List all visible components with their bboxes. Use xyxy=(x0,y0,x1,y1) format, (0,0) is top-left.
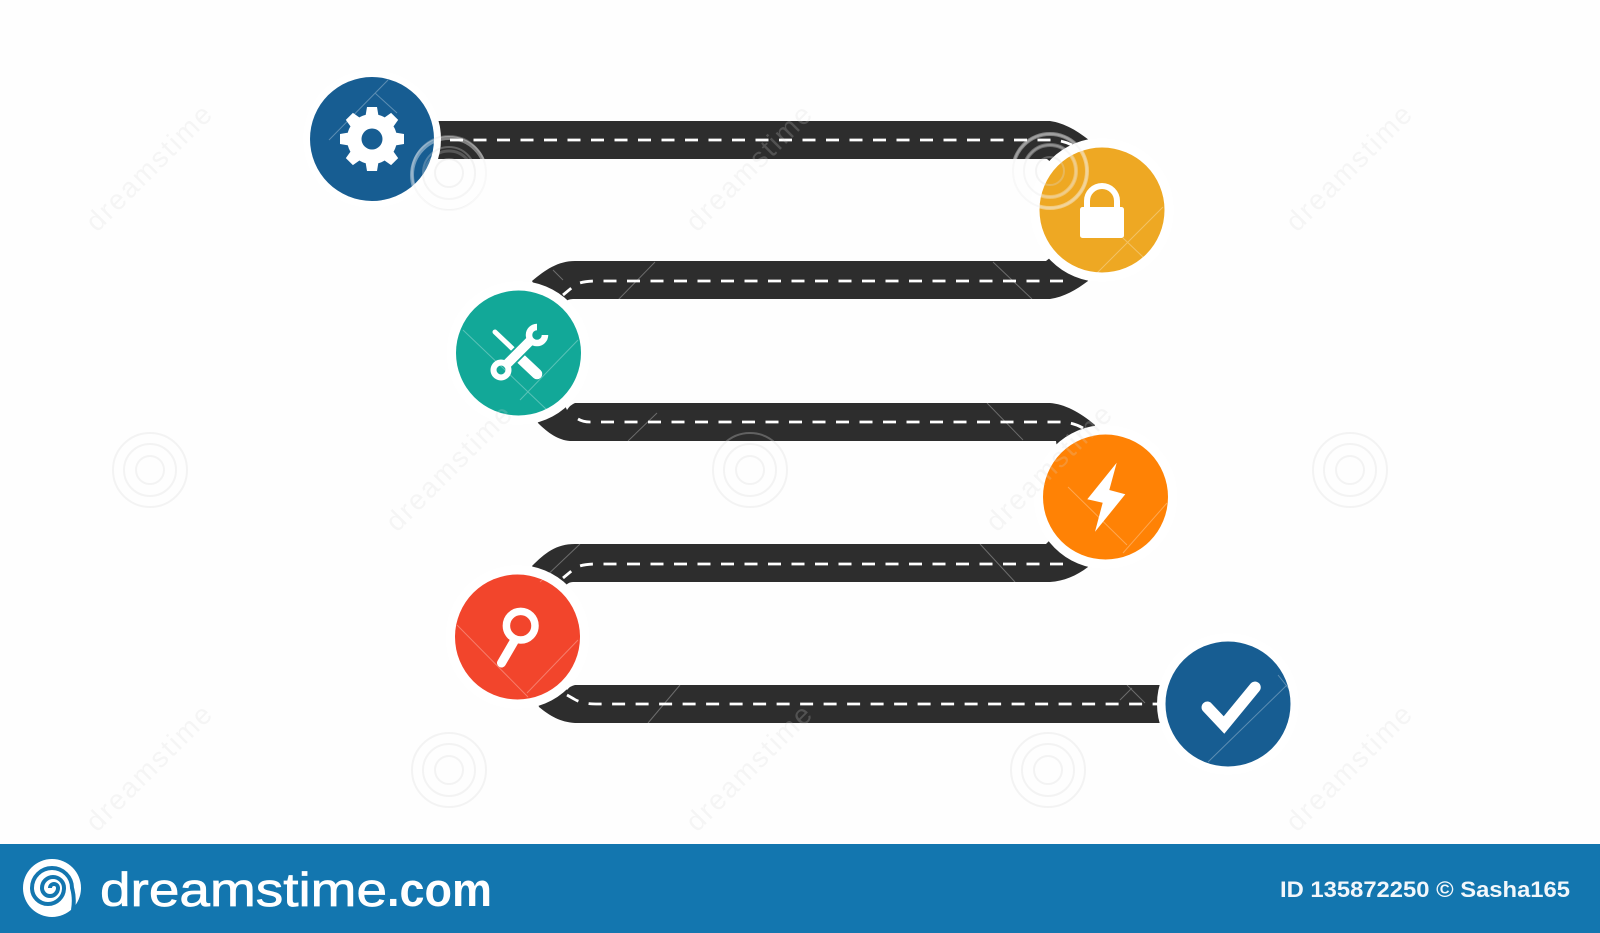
watermark text: dreamstime xyxy=(679,699,818,837)
logo wordmark xyxy=(100,863,492,916)
watermark text: dreamstime xyxy=(679,99,818,237)
road segment 1 xyxy=(420,121,1095,170)
step 1: gear xyxy=(303,70,441,208)
step 5: magnifier xyxy=(446,565,590,709)
watermark spirals xyxy=(113,134,1387,807)
watermark text: dreamstime xyxy=(79,99,218,237)
step 2: lock xyxy=(1030,138,1174,282)
footer banner xyxy=(0,844,1600,933)
road segment 5 xyxy=(530,672,1170,723)
road segment 2 xyxy=(532,250,1095,320)
step 3: tools xyxy=(446,281,590,425)
icon: lightning bolt xyxy=(1087,463,1125,532)
image id and credit: ID 135872250 © Sasha165 xyxy=(1280,877,1570,902)
winding road xyxy=(420,121,1170,723)
step 6: check xyxy=(1157,633,1299,775)
watermark text: dreamstime xyxy=(379,399,518,537)
logo wordmark: .com xyxy=(387,863,492,916)
icon: logo spiral xyxy=(23,859,81,917)
road segment 4 xyxy=(532,530,1095,600)
logo wordmark: dreamstime xyxy=(100,863,387,916)
road segment 3 xyxy=(530,395,1095,470)
step 4: lightning xyxy=(1034,425,1178,569)
icon: check mark xyxy=(1207,687,1255,725)
watermark text: dreamstime xyxy=(1279,699,1418,837)
icon: gear xyxy=(340,107,404,171)
watermark text: dreamstime xyxy=(1279,99,1418,237)
watermark text xyxy=(79,99,1418,837)
icon: wrench and screwdriver xyxy=(494,327,545,378)
watermark text: dreamstime xyxy=(79,699,218,837)
watermark text: dreamstime xyxy=(979,399,1118,537)
icon: magnifying glass xyxy=(502,611,535,663)
watermark lattice lines xyxy=(329,80,1290,762)
icon: padlock xyxy=(1080,186,1124,238)
